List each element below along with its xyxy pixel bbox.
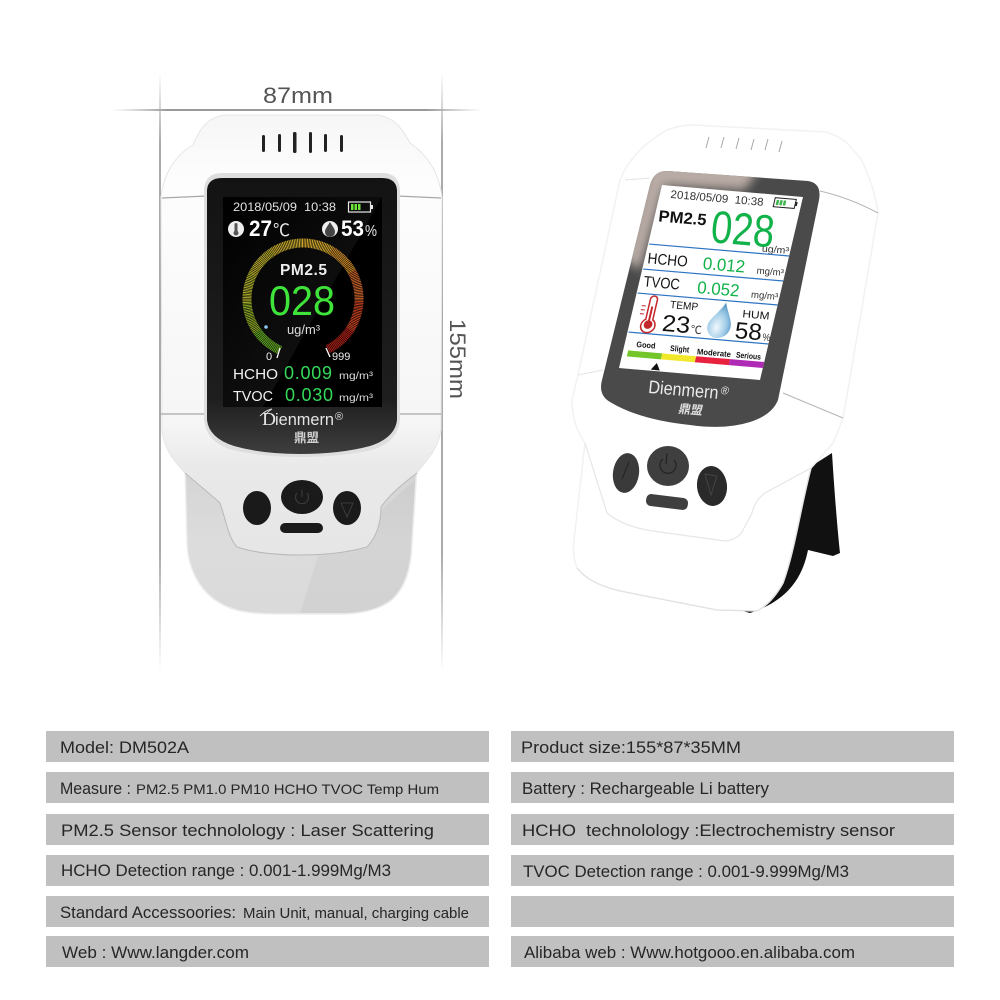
pm2.5 value: 028: [269, 277, 335, 324]
spec table right column: [511, 731, 954, 967]
air quality labels: [634, 340, 763, 362]
tvoc row: 0.030: [285, 385, 333, 405]
right extension line: [441, 72, 443, 672]
row: measure: [46, 772, 489, 803]
row: measure: Measure :: [60, 780, 131, 798]
row: product size: [511, 731, 954, 762]
water drop icon: [705, 302, 736, 339]
hcho row: [644, 248, 788, 280]
bezel: [601, 171, 820, 427]
raised panel outline: [585, 443, 811, 541]
brand logo: D: [262, 409, 276, 429]
body seam lines: [161, 196, 441, 414]
battery icon: [348, 202, 373, 212]
temperature value: 23: [661, 310, 692, 338]
row: pm2.5 sensor: PM2.5 Sensor technolology : Laser Scattering: [61, 822, 434, 840]
button: down: [695, 465, 729, 507]
humidity value: 58: [734, 317, 763, 345]
lower body: [185, 468, 417, 614]
hcho row: [233, 363, 374, 383]
brand logo: Dienmern: [647, 377, 719, 403]
button: down: [333, 491, 361, 525]
body: [572, 125, 878, 611]
button: power: [647, 446, 689, 486]
brand logo: [260, 409, 343, 445]
button: bar: [645, 493, 689, 511]
temperature reading: ℃: [273, 221, 290, 240]
lower body sheen: [300, 480, 415, 613]
status dot: [264, 325, 268, 329]
brand logo: 鼎盟: [294, 431, 320, 445]
panel shadow edge: [185, 473, 417, 555]
tvoc row: 0.052: [696, 277, 740, 301]
power glyph: [660, 453, 676, 473]
hcho row: 0.009: [284, 363, 332, 383]
row: accessories: Main Unit, manual, charging cable: [243, 906, 469, 922]
gauge minimum: 0: [266, 351, 272, 363]
side seam lines: [783, 191, 878, 418]
row: measure: PM2.5 PM1.0 PM10 HCHO TVOC Temp Hum: [136, 781, 439, 797]
row: hcho range: HCHO Detection range : 0.001-1.999Mg/M3: [61, 862, 391, 880]
hcho row: mg/m³: [339, 371, 374, 382]
thermometer icon: [636, 295, 662, 333]
hcho row: HCHO: [233, 366, 278, 383]
brand logo: ®: [719, 385, 731, 398]
lcd screen: [609, 185, 804, 422]
pm2.5 value: 028: [709, 201, 777, 257]
battery icon: [773, 198, 798, 209]
spec table left column: [46, 731, 489, 967]
width label: 87mm: [263, 83, 333, 108]
down glyph: [341, 503, 353, 517]
humidity reading: 53: [341, 216, 364, 241]
hcho row: mg/m³: [756, 266, 784, 279]
temperature reading: 27: [249, 216, 272, 241]
brand logo: ®: [335, 411, 343, 423]
row: tvoc range: [511, 855, 954, 886]
row: hcho range: [46, 855, 489, 886]
height label: 155mm: [445, 319, 470, 399]
brand logo: [641, 377, 731, 420]
humidity reading: [322, 216, 377, 241]
tvoc row: [640, 272, 782, 304]
stand: [700, 453, 840, 613]
unit: ug/m³: [761, 244, 789, 257]
hcho row: 0.012: [702, 253, 746, 277]
bezel glare: [625, 160, 760, 270]
up glyph: [622, 462, 629, 479]
air quality labels: Moderate: [696, 347, 732, 359]
pm2.5 label: PM2.5: [280, 262, 327, 279]
brand logo: 鼎盟: [677, 402, 704, 418]
air quality bar: [627, 350, 764, 368]
lcd screen: [223, 197, 382, 407]
pm2.5 gauge arc: [247, 243, 359, 350]
row: pm2.5 sensor: [46, 814, 489, 845]
tvoc row: mg/m³: [339, 393, 374, 404]
vents: [706, 137, 782, 152]
button: up: [610, 451, 642, 495]
tvoc row: TVOC: [233, 388, 273, 405]
pm2.5 label: PM2.5: [658, 207, 707, 229]
lower edge shadow: [577, 468, 811, 611]
row: model: [46, 731, 489, 762]
date and time: 2018/05/09 10:38: [233, 200, 336, 214]
row: alibaba web: Alibaba web : Www.hotgooo.en.alibaba.com: [524, 944, 855, 962]
bezel ring: [204, 173, 400, 457]
buttons: [243, 480, 361, 533]
unit: ug/m³: [287, 323, 320, 337]
row: tvoc range: TVOC Detection range : 0.001-9.999Mg/M3: [523, 863, 849, 881]
air quality labels: Slight: [670, 344, 690, 355]
row: empty: [511, 896, 954, 927]
temperature label: TEMP: [669, 299, 699, 313]
humidity reading: %: [365, 223, 377, 240]
hcho row: HCHO: [647, 250, 689, 271]
left extension line: [159, 72, 161, 672]
screen bezel: [207, 178, 397, 454]
front view device: [161, 115, 442, 614]
percent unit: %: [762, 332, 771, 344]
row: web: Web : Www.langder.com: [62, 944, 249, 962]
screen sheen: [223, 197, 382, 407]
button: bar: [280, 523, 323, 533]
width dimension line: [112, 109, 482, 111]
date and time: 2018/05/09 10:38: [670, 189, 764, 209]
row: alibaba web: [511, 936, 954, 967]
air quality labels: Good: [636, 340, 656, 351]
level marker: [651, 363, 661, 370]
buttons: [610, 446, 729, 511]
humidity label: HUM: [742, 308, 770, 323]
row: accessories: [46, 896, 489, 927]
tvoc row: [233, 385, 374, 405]
row: battery: [511, 772, 954, 803]
temperature reading: [228, 216, 290, 241]
button: power: [281, 480, 323, 514]
row: battery: Battery : Rechargeable Li battery: [522, 780, 770, 798]
speaker vents: [262, 132, 343, 153]
row: model: Model: DM502A: [60, 739, 189, 757]
down glyph: [705, 474, 717, 495]
tvoc row: mg/m³: [750, 290, 779, 303]
tvoc row: TVOC: [643, 273, 681, 293]
gauge maximum: 999: [332, 351, 350, 363]
row: accessories: Standard Accessoories:: [60, 904, 236, 922]
upper body: [161, 115, 442, 555]
button: up: [243, 491, 271, 525]
row: hcho technology: [511, 814, 954, 845]
power glyph: [296, 490, 309, 504]
row: product size: Product size:155*87*35MM: [521, 739, 741, 757]
gauge end ticks: [277, 348, 330, 358]
row: hcho technology: HCHO technolology :Electrochemistry sensor: [522, 822, 896, 840]
air quality labels: Serious: [735, 351, 762, 362]
celsius unit: ℃: [690, 324, 702, 337]
row: web: [46, 936, 489, 967]
brand logo: ienmern: [275, 410, 334, 429]
left seam lines: [578, 178, 650, 375]
angled view device: [572, 125, 878, 613]
divider lines: [628, 244, 789, 344]
